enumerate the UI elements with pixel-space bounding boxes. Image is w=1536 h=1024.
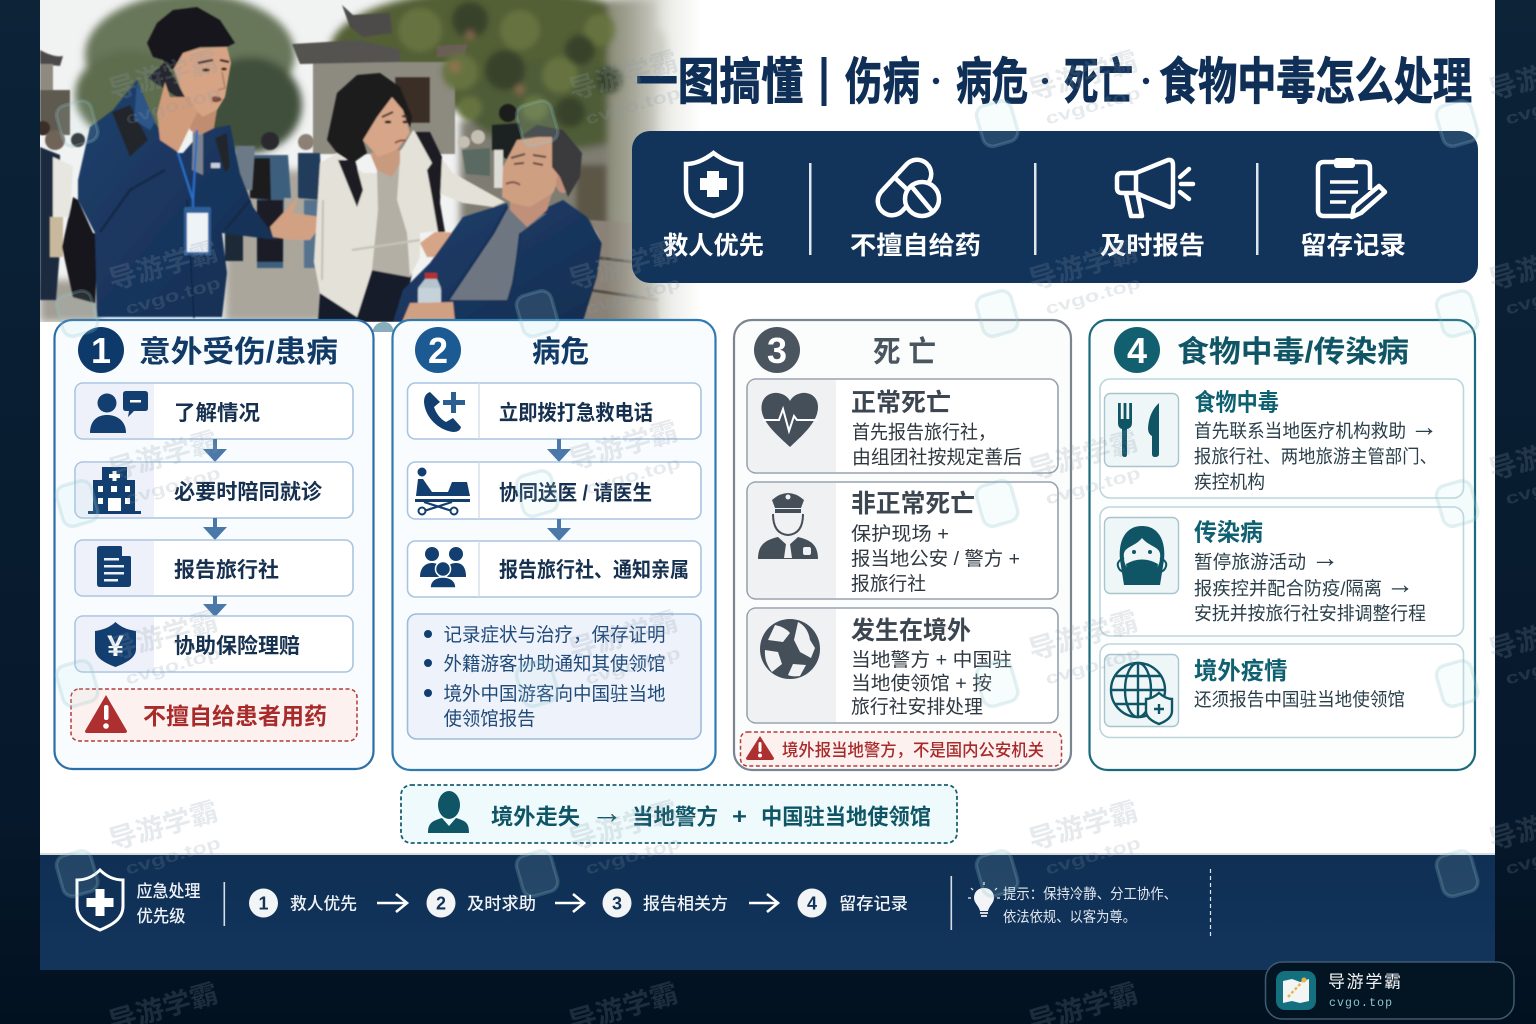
number badge 4: 4	[1127, 330, 1147, 371]
background crowd	[40, 147, 60, 300]
text: cvgo.top	[123, 273, 223, 319]
warning: no unauthorised medication: 不擅自给患者用药	[143, 703, 327, 729]
title: 病危	[956, 54, 1028, 110]
card: 非正常死亡: 保护现场 +	[851, 523, 949, 545]
title: 一图搞懂	[636, 54, 803, 110]
footer band: emergency priority	[40, 853, 1495, 970]
step: 协同送医 / 请医生: 协同送医 / 请医生	[499, 482, 652, 505]
card: 正常死亡: 由组团社按规定善后	[852, 446, 1022, 468]
label: 应急处理优先级	[136, 882, 200, 926]
card: 非正常死亡	[747, 482, 1058, 599]
step: 必要时陪同就诊	[75, 462, 353, 518]
step 1: 救人优先	[290, 894, 357, 914]
arrow	[203, 596, 227, 617]
number badge 1: 1	[91, 330, 111, 371]
card: 发生在境外: 当地警方 + 中国驻	[851, 649, 1012, 671]
icon: pills crossed out	[892, 174, 939, 216]
card: 传染病: →	[1386, 568, 1414, 600]
text: 导游学霸	[565, 236, 681, 296]
panel: four principles banner	[632, 131, 1478, 283]
title: 伤病	[845, 54, 920, 110]
number badge 3: 3	[767, 330, 787, 371]
step: 了解情况	[75, 383, 353, 439]
panel 1: 意外受伤/患病	[54, 320, 374, 769]
heading: 死 亡	[873, 336, 936, 369]
icon: document	[97, 546, 131, 587]
text: cvgo.top	[123, 83, 223, 129]
panel 2: 病危	[392, 320, 716, 770]
card: 正常死亡: 首先报告旅行社，	[852, 422, 996, 444]
panel 4: 食物中毒/传染病	[1090, 320, 1475, 770]
step 4: 4	[807, 894, 817, 914]
step: 报告旅行社	[75, 540, 353, 596]
callout: missing overseas: +	[732, 804, 747, 829]
woman	[318, 270, 412, 322]
step: 立即拨打急救电话: 立即拨打急救电话	[499, 401, 653, 425]
older man: bench	[580, 220, 660, 322]
title	[636, 54, 1472, 110]
logo badge: 导游学霸 cvgo.top: 导游学霸	[1328, 972, 1401, 992]
step: 协助保险理赔	[75, 616, 353, 672]
card: 传染病	[1100, 507, 1464, 636]
text: cvgo.top	[583, 833, 683, 879]
step 3	[602, 888, 728, 918]
card: 发生在境外: 旅行社安排处理	[851, 696, 983, 718]
icon: person with speech bubble	[90, 391, 148, 433]
photo: tour guide calling for help beside an unwell traveller	[36, 0, 720, 322]
card: 食物中毒	[1100, 379, 1464, 498]
icon: police officer	[758, 493, 818, 559]
tip text	[1003, 886, 1177, 926]
arrow	[203, 518, 227, 540]
title: 死亡	[1064, 54, 1133, 110]
label: 不擅自给药: 不擅自给药	[850, 232, 981, 260]
step: 报告旅行社: 报告旅行社	[174, 559, 279, 582]
icon: person wearing mask	[1118, 526, 1166, 585]
right background	[576, 165, 606, 225]
icon: megaphone	[1117, 160, 1193, 216]
icon: clipboard with pencil	[1318, 158, 1385, 217]
card: 食物中毒: 首先联系当地医疗机构救助	[1194, 420, 1406, 442]
card: 发生在境外: 发生在境外	[851, 617, 971, 645]
card: 传染病: →	[1311, 542, 1339, 573]
card: 食物中毒: 报旅行社、两地旅游主管部门、	[1194, 446, 1437, 467]
step: 必要时陪同就诊: 必要时陪同就诊	[174, 481, 323, 504]
step 2: 及时求助	[467, 894, 536, 914]
heading: 病危	[532, 336, 589, 369]
card: 食物中毒: →	[1410, 411, 1438, 442]
label: 应急处理优先级: 优先级	[136, 907, 186, 926]
step 3: 3	[612, 894, 622, 914]
card: 非正常死亡: 报当地公安 / 警方 +	[851, 548, 1020, 570]
text: cvgo.top	[123, 463, 223, 509]
step: 协助保险理赔: 协助保险理赔	[174, 634, 300, 658]
text: 导游学霸	[565, 606, 681, 666]
card: 境外疫情	[1100, 644, 1464, 738]
older man	[393, 200, 602, 322]
number badge 3	[754, 327, 800, 373]
callout: missing overseas: 当地警方	[632, 804, 718, 830]
step 1: 1	[258, 894, 269, 914]
callout: missing overseas: 中国驻当地使领馆	[761, 804, 931, 830]
logo badge: 导游学霸 cvgo.top	[1266, 962, 1514, 1019]
text: cvgo.top	[123, 643, 223, 689]
tab between panels 1 and 2	[372, 322, 394, 332]
warning: overseas report to local police	[740, 732, 1062, 766]
text: cvgo.top	[583, 273, 683, 319]
text: 导游学霸	[105, 796, 221, 856]
text: 导游学霸	[565, 46, 681, 106]
text: 导游学霸	[105, 46, 221, 106]
heading: 食物中毒/传染病	[1177, 336, 1409, 369]
card: 传染病: 报疾控并配合防疫/隔离	[1194, 578, 1382, 599]
arrow	[749, 894, 778, 912]
step 1	[249, 888, 357, 918]
text: 导游学霸	[565, 416, 681, 476]
text: 导游学霸	[1025, 606, 1141, 666]
text: 导游学霸	[105, 426, 221, 486]
icon: footer shield	[77, 870, 123, 930]
text: 导游学霸	[1025, 46, 1141, 106]
card: 传染病: 传染病	[1194, 520, 1263, 546]
panel 3: 死亡	[734, 320, 1071, 770]
label: 应急处理优先级: 应急处理	[136, 882, 200, 901]
arrow	[203, 439, 227, 462]
number badge 2	[415, 327, 461, 373]
logo badge: 导游学霸 cvgo.top: cvgo.top	[1329, 997, 1392, 1010]
callout: missing overseas: 境外走失	[491, 804, 580, 830]
notes: records and consulate: 使领馆报告	[444, 708, 536, 730]
icon: warning triangle	[85, 695, 127, 733]
text: cvgo.top	[1043, 273, 1143, 319]
icon: map logo	[1276, 971, 1316, 1010]
text: cvgo.top	[1043, 83, 1143, 129]
card: 非正常死亡: 非正常死亡	[851, 490, 975, 518]
icon: fork and knife	[1118, 403, 1159, 457]
text: cvgo.top	[583, 643, 683, 689]
card: 非正常死亡: 报旅行社	[851, 573, 926, 595]
card: 食物中毒: 食物中毒	[1194, 388, 1279, 416]
number badge 1	[78, 327, 124, 373]
arrow	[547, 439, 571, 462]
step: 报告旅行社、通知亲属	[408, 541, 701, 597]
number badge 2: 2	[428, 330, 448, 371]
card: 食物中毒: 疾控机构	[1194, 472, 1265, 492]
man: backpack	[61, 196, 98, 304]
card: 境外疫情: 还须报告中国驻当地使领馆	[1194, 689, 1405, 710]
card: 发生在境外: 当地使领馆 + 按	[851, 672, 992, 694]
step 2	[426, 888, 536, 918]
warning: overseas report to local police: 境外报当地警方，不是国内公安机关	[782, 740, 1044, 760]
card: 正常死亡: 正常死亡	[851, 389, 951, 417]
step 2: 2	[436, 894, 446, 914]
icon: stretcher	[415, 468, 470, 514]
icon: shield with yen: ¥	[107, 630, 124, 663]
warning: no unauthorised medication	[71, 689, 357, 741]
number badge 4	[1114, 327, 1160, 373]
icon: globe	[760, 619, 820, 679]
notes: records and consulate	[408, 614, 701, 739]
icon: phone with plus	[424, 392, 465, 432]
step 4: 留存记录	[839, 894, 908, 914]
icon: globe with shield	[1111, 663, 1172, 724]
text: 导游学霸	[1025, 796, 1141, 856]
icon: person	[428, 791, 469, 833]
step: 协同送医 / 请医生	[408, 462, 701, 519]
tree leaf texture	[398, 8, 616, 121]
text: 导游学霸	[105, 606, 221, 666]
arrow	[555, 894, 584, 912]
card: 传染病: 安抚并按旅行社安排调整行程	[1194, 603, 1426, 624]
text: cvgo.top	[1043, 643, 1143, 689]
callout: missing overseas	[401, 785, 957, 843]
text: 导游学霸	[1025, 236, 1141, 296]
text: 导游学霸	[1025, 426, 1141, 486]
tip text: 提示：保持冷静、分工协作、	[1003, 886, 1177, 903]
tip text: 依法依规、以客为尊。	[1003, 909, 1136, 926]
label: 救人优先: 救人优先	[663, 232, 764, 260]
arrow	[547, 519, 571, 541]
icon: three people	[420, 547, 466, 588]
step 4	[798, 888, 908, 918]
temple left	[40, 50, 63, 66]
icon: heart with pulse	[761, 393, 818, 447]
card: 传染病: 暂停旅游活动	[1194, 552, 1306, 572]
notes: records and consulate: 记录症状与治疗，保存证明	[444, 624, 666, 646]
heading: 意外受伤/患病	[139, 336, 338, 369]
text: cvgo.top	[123, 833, 223, 879]
man: jacket	[78, 80, 277, 317]
icon: light bulb	[968, 882, 1000, 916]
notes: records and consulate: 外籍游客协助通知其使领馆	[444, 653, 666, 675]
text: cvgo.top	[1043, 463, 1143, 509]
callout: missing overseas: →	[591, 794, 623, 830]
step 3: 报告相关方	[643, 894, 728, 914]
text: 导游学霸	[565, 796, 681, 856]
step: 报告旅行社、通知亲属: 报告旅行社、通知亲属	[499, 559, 689, 582]
label: 及时报告: 及时报告	[1100, 232, 1205, 260]
notes: records and consulate: 境外中国游客向中国驻当地	[444, 683, 666, 705]
step: 立即拨打急救电话	[408, 383, 701, 439]
card: 正常死亡	[747, 379, 1058, 473]
text: 导游学霸	[105, 236, 221, 296]
card: 境外疫情: 境外疫情	[1194, 658, 1288, 685]
text: cvgo.top	[583, 83, 683, 129]
text: cvgo.top	[583, 453, 683, 499]
text: cvgo.top	[1043, 833, 1143, 879]
temple centre	[313, 62, 455, 154]
arrow	[377, 894, 407, 912]
icon: hospital	[88, 467, 141, 514]
label: 留存记录: 留存记录	[1300, 232, 1406, 260]
card: 发生在境外	[747, 608, 1058, 723]
icon: shield with yen	[95, 622, 136, 667]
icon: shield with cross	[686, 153, 741, 216]
icon: warning triangle	[746, 736, 774, 760]
step: 了解情况: 了解情况	[174, 402, 260, 425]
